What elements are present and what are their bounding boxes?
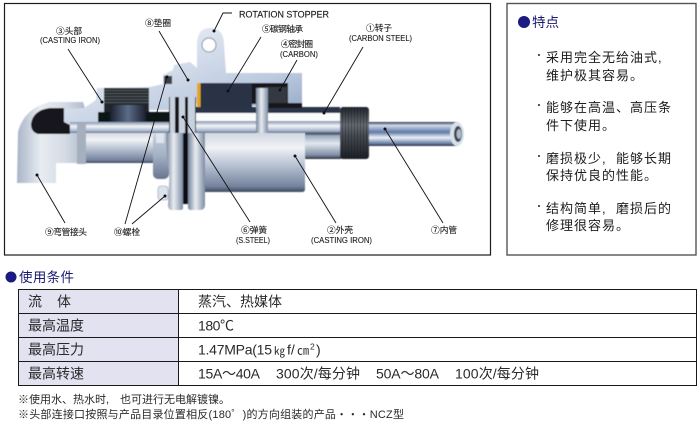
label: outer casing (311, 224, 372, 245)
left flange (153, 133, 169, 179)
dark seat under housing (268, 103, 302, 108)
features heading: 特点 (532, 15, 559, 30)
features heading (518, 15, 559, 30)
rotor band across centre (70, 122, 200, 133)
panel: features (507, 4, 696, 255)
clamp gap (183, 133, 188, 204)
feature 3: 磨损极少, (546, 151, 607, 166)
panel: cutaway diagram (4, 4, 490, 255)
rotor lower right (305, 133, 341, 159)
head base dark band (98, 112, 169, 122)
label: elbow: ⑨弯管接头 (45, 226, 87, 237)
label: rotor (349, 22, 412, 43)
feature 3 (538, 151, 672, 183)
label: head (40, 25, 100, 45)
label: spring: ⑥弹簧 (241, 224, 267, 235)
springs (170, 97, 195, 133)
table: usage conditions (18, 290, 696, 386)
footnote 1: ※使用水、热水时, (18, 393, 109, 406)
feature 1: 维护极其容易。 (546, 68, 644, 83)
row: max speed: 50A～80A (376, 366, 440, 382)
bolt box (164, 76, 172, 84)
footnote 1 (18, 392, 230, 406)
row: max pressure (28, 342, 321, 358)
row: fluid: 蒸汽、热媒体 (198, 294, 282, 310)
feature 4: 结构简单, (546, 201, 607, 216)
row: max temperature: 最高温度 (28, 318, 84, 334)
rotor thread (340, 107, 369, 159)
label: head: (CASTING IRON) (40, 36, 100, 45)
feature 4: 磨损后的 (616, 201, 672, 216)
row: max speed: 300次/每分钟 (276, 366, 360, 382)
label: outer casing: (CASTING IRON) (311, 236, 372, 245)
leader lines with end dots (36, 13, 443, 224)
feature 3: 保持优良的性能。 (546, 168, 658, 183)
label: rotor: (CARBON STEEL) (349, 34, 412, 43)
row: max temperature (28, 318, 234, 334)
row: max speed: 最高转速 (28, 366, 84, 382)
feature 2 (538, 100, 672, 133)
feature 4 (538, 201, 672, 233)
rotor lower section at left (76, 132, 156, 163)
feature 3: 能够长期 (616, 151, 672, 166)
orange carbon strip (197, 83, 200, 107)
label: bolt: ⑩螺栓 (114, 226, 140, 237)
outer casing (203, 133, 305, 192)
bolt (158, 186, 168, 200)
dark spring cavity (169, 97, 196, 133)
feature 2: 件下使用。 (546, 118, 616, 133)
feature 2: 能够在高温、高压条 (546, 100, 672, 115)
label: inner pipe: ⑦内管 (431, 224, 457, 235)
elbow fitting (17, 102, 85, 183)
label: head: ③头部 (56, 25, 82, 36)
row: max speed (28, 366, 539, 382)
label: carbon steel bearing: ⑤碳钢轴承 (262, 23, 303, 34)
label: gasket: ⑧垫圈 (145, 17, 171, 28)
feature 4: 修理很容易。 (546, 218, 630, 233)
clamp left (166, 133, 183, 210)
feature 1: 采用完全无给油式, (546, 50, 663, 65)
label: rotor: ①转子 (366, 22, 392, 33)
head and upper housing (64, 28, 302, 122)
inner pipe (368, 122, 458, 146)
row: max pressure: f/ (287, 342, 295, 358)
row: fluid: 流 (28, 294, 42, 310)
label: spring: (S.STEEL) (236, 236, 270, 245)
row: max pressure: ) (316, 342, 321, 358)
section heading: usage conditions: 使用条件 (19, 269, 74, 285)
row: max pressure: 1.47MPa(15 (198, 342, 272, 358)
pipe end (450, 122, 464, 146)
label: seal ring: (CARBON) (280, 50, 318, 59)
row: max speed: 100次/每分钟 (455, 366, 539, 382)
head thread (104, 88, 149, 112)
bearing block (200, 83, 252, 107)
footnote 1: 也可进行无电解镀镍。 (120, 392, 230, 406)
row: max pressure: ㎝ (297, 344, 309, 358)
weld ring (77, 123, 86, 164)
feature 1 (538, 50, 663, 83)
row: max temperature: 180℃ (198, 318, 234, 334)
label: spring (236, 224, 270, 245)
stopper hole (202, 38, 216, 52)
label: seal ring: ④密封圈 (281, 38, 313, 49)
row: max pressure: 2 (310, 342, 315, 352)
elbow cavity (31, 108, 70, 134)
carbon seal (252, 83, 288, 104)
row: fluid (28, 294, 282, 310)
label: outer casing: ②外壳 (327, 224, 353, 235)
clamp right (188, 133, 205, 210)
rotary joint cutaway illustration (17, 28, 464, 210)
flange ring (256, 88, 268, 133)
footnote 2: ※头部连接口按照与产品目录位置相反(180゜)的方向组装的产品・・・NCZ型 (18, 407, 404, 421)
row: fluid: 体 (57, 294, 71, 310)
label: seal ring (280, 38, 318, 59)
row: max pressure: 最高压力 (28, 342, 84, 358)
row: max speed: 15A～40A (198, 366, 261, 382)
thread bore (110, 105, 146, 122)
row: max pressure: ㎏ (274, 344, 285, 358)
label: rotation stopper: ROTATION STOPPER (239, 10, 329, 20)
